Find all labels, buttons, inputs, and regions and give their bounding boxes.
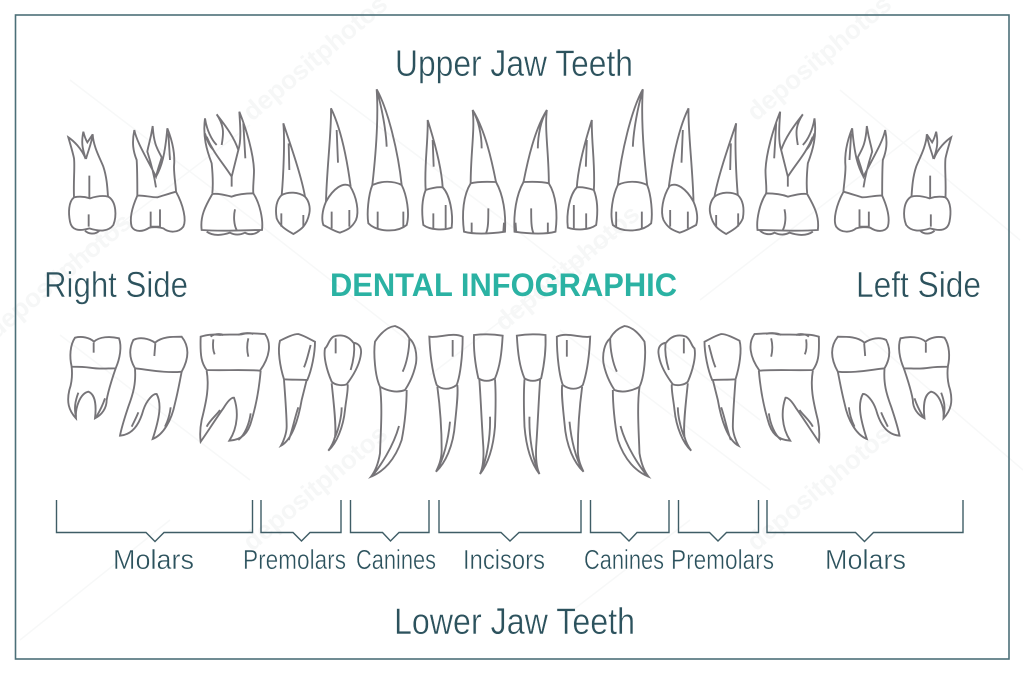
lower tooth: canine left side	[603, 326, 649, 477]
lower tooth: first premolar right side	[325, 336, 361, 451]
text: depositphotos	[237, 418, 393, 557]
upper tooth: second premolar right side	[276, 123, 310, 234]
lower tooth: first premolar left side	[658, 336, 695, 451]
label: left side: Left Side	[856, 264, 981, 305]
lower tooth: second molar right side	[120, 337, 187, 439]
lower tooth: first molar right side	[200, 333, 269, 442]
upper tooth: third molar left side	[904, 132, 951, 234]
upper tooth: second molar left side	[835, 126, 889, 232]
upper jaw teeth row	[68, 89, 951, 235]
title: upper jaw teeth: Upper Jaw Teeth	[395, 43, 633, 84]
upper tooth: third molar right side	[68, 132, 115, 234]
bracket: incisors	[439, 500, 581, 541]
lower tooth: second premolar right side	[279, 334, 315, 446]
lower tooth: second molar left side	[832, 337, 900, 439]
lower tooth: central incisor left side	[517, 334, 546, 474]
lower tooth: first molar left side	[751, 333, 819, 442]
upper tooth: second premolar left side	[710, 123, 743, 234]
upper tooth: first molar left side	[757, 112, 818, 235]
lower jaw teeth row	[68, 326, 951, 477]
lower tooth: central incisor right side	[474, 334, 503, 474]
label: premolars left side: Premolars	[671, 544, 774, 575]
lower tooth: second premolar left side	[705, 334, 741, 446]
lower tooth: third molar left side	[899, 337, 951, 418]
upper tooth: first premolar left side	[662, 108, 697, 233]
brackets grouping teeth types	[56, 500, 963, 542]
label: molars left side: Molars	[825, 544, 906, 575]
upper tooth: lateral incisor right side	[422, 120, 452, 229]
label: premolars right side: Premolars	[243, 544, 346, 575]
bracket: molars right side	[56, 500, 252, 542]
text: depositphotos	[489, 198, 645, 337]
bracket: premolars right side	[261, 500, 341, 541]
heading: dental infographic: DENTAL INFOGRAPHIC	[330, 267, 677, 303]
upper tooth: first premolar right side	[322, 108, 357, 233]
label: right side: Right Side	[44, 264, 188, 305]
lower tooth: lateral incisor right side	[429, 335, 463, 472]
upper tooth: central incisor left side	[514, 110, 556, 234]
bracket: canines right side	[350, 500, 429, 541]
upper tooth: canine right side	[368, 89, 408, 230]
text: depositphotos	[741, 418, 897, 557]
lower tooth: lateral incisor left side	[557, 335, 590, 472]
bracket: premolars left side	[678, 500, 758, 541]
upper tooth: central incisor right side	[463, 110, 505, 234]
label: incisors: Incisors	[463, 544, 545, 575]
upper tooth: second molar right side	[131, 126, 185, 232]
upper tooth: canine left side	[611, 89, 652, 230]
label: molars right side: Molars	[113, 544, 194, 575]
bracket: molars left side	[767, 500, 963, 542]
label: canines left side: Canines	[584, 544, 664, 575]
upper tooth: first molar right side	[201, 112, 262, 235]
lower tooth: canine right side	[371, 326, 416, 477]
bracket: canines left side	[590, 500, 669, 541]
label: canines right side: Canines	[356, 544, 436, 575]
upper tooth: lateral incisor left side	[567, 120, 597, 229]
title: lower jaw teeth: Lower Jaw Teeth	[394, 601, 635, 642]
lower tooth: third molar right side	[68, 337, 120, 418]
